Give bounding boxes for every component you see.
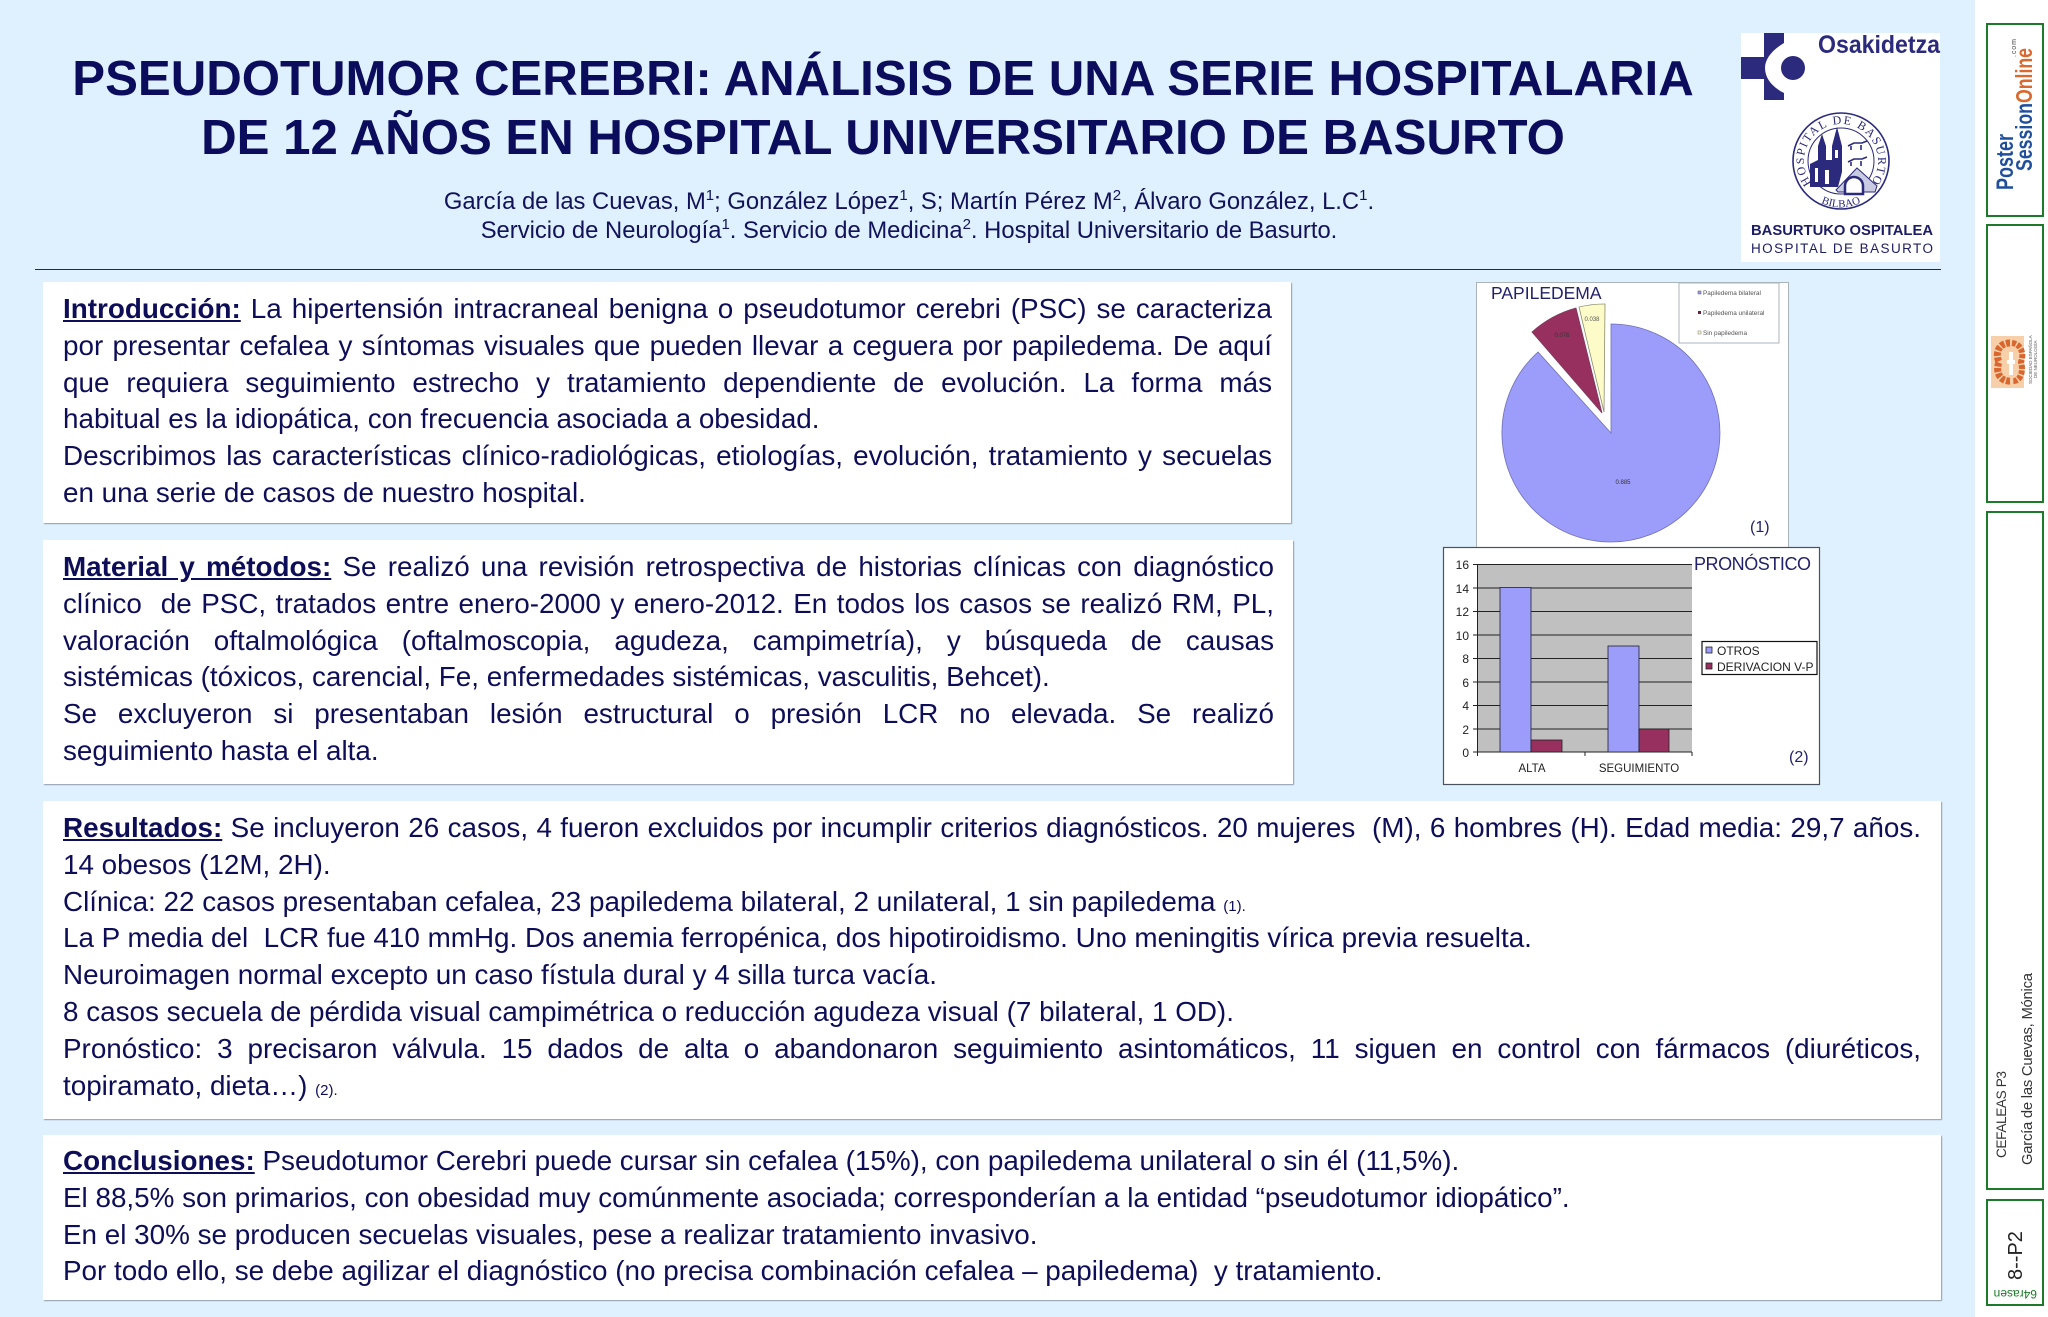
x axis labels xyxy=(1518,763,1679,775)
text: introducción: que requiera seguimiento estrecho y tratamiento dependiente de evolución. La forma más xyxy=(63,367,1272,398)
logo: PosterSessionOnline: Session xyxy=(2011,103,2037,171)
y axis labels xyxy=(1456,558,1469,760)
panel: conclusiones xyxy=(43,1135,1941,1300)
text: resultados: La P media del LCR fue 410 mmHg. Dos anemia ferropénica, dos hipotiroidismo. Uno meningitis vírica previa resuelta. xyxy=(63,922,1532,953)
panel: material y métodos xyxy=(43,540,1293,784)
y axis labels: 16 xyxy=(1456,558,1469,572)
sidebar xyxy=(1975,0,2048,1317)
text: material y métodos: valoración oftalmológica (oftalmoscopia, agudeza, campimetría), y búsqueda de causas xyxy=(63,625,1274,656)
legend: DERIVACION V-P xyxy=(1717,660,1813,674)
text: material y métodos xyxy=(63,551,1274,766)
pie chart: papiledema xyxy=(1476,282,1789,547)
text: resultados: Clínica: 22 casos presentaban cefalea, 23 papiledema bilateral, 2 unilateral, 1 sin papiledema (1). xyxy=(63,886,1246,917)
session label: CEFALEAS P3 xyxy=(1994,1071,2009,1158)
y axis labels: 6 xyxy=(1462,676,1469,690)
title: PSEUDOTUMOR CEREBRI: ANÁLISIS DE UNA SERIE HOSPITALARIA xyxy=(72,51,1694,106)
slice: unilateral xyxy=(1532,308,1602,413)
legend: Sin papiledema xyxy=(1703,330,1748,337)
text: material y métodos: Material y métodos: Se realizó una revisión retrospectiva de historias clínicas con diagnóstico xyxy=(63,551,1274,582)
bars: seguimiento xyxy=(1608,646,1669,752)
logo: PosterSessionOnline: Poster xyxy=(1992,134,2019,190)
y axis labels: 10 xyxy=(1456,629,1469,643)
legend: Papiledema bilateral xyxy=(1703,290,1761,297)
authors and affiliations xyxy=(444,187,1374,244)
text: introducción: por presentar cefalea y síntomas visuales que pueden llevar a ceguera por papiledema. De aquí xyxy=(63,330,1272,361)
session label xyxy=(1994,972,2036,1165)
slice: sin papiledema xyxy=(1579,304,1605,412)
legend xyxy=(1702,642,1817,674)
chart title: PAPILEDEMA xyxy=(1491,283,1602,303)
panel: resultados xyxy=(43,801,1941,1119)
x axis labels: SEGUIMIENTO xyxy=(1599,763,1679,775)
text: material y métodos: clínico de PSC, tratados entre enero-2000 y enero-2012. En todos los casos se realizó RM, PL, xyxy=(63,588,1274,619)
text: introducción: en una serie de casos de nuestro hospital. xyxy=(63,477,586,508)
authors and affiliations: Servicio de Neurología1. Servicio de Medicina2. Hospital Universitario de Basurto. xyxy=(481,216,1337,244)
box: PosterSessionOnline logo xyxy=(1986,23,2044,217)
pie chart: papiledema: 0.038 xyxy=(1584,317,1600,323)
reference (1): (1) xyxy=(1750,519,1770,536)
title xyxy=(72,51,1694,165)
logo text: Basurtuko Ospitalea: BASURTUKO OSPITALEA xyxy=(1751,222,1933,239)
text: conclusiones: Por todo ello, se debe agilizar el diagnóstico (no precisa combinación cefalea – papiledema) y tratamiento. xyxy=(63,1255,1382,1286)
text: resultados: 8 casos secuela de pérdida visual campimétrica o reducción agudeza visual (7 bilateral, 1 OD). xyxy=(63,996,1234,1027)
text: introducción xyxy=(63,293,1272,508)
text: resultados: 14 obesos (12M, 2H). xyxy=(63,849,331,880)
logo: PosterSessionOnline: .com xyxy=(2011,39,2018,57)
logo: Sociedad Española de Neurología xyxy=(1991,335,2038,388)
code label inverted: 64rasen xyxy=(1994,1287,2037,1301)
bar chart: pronóstico xyxy=(1442,546,1820,786)
text: conclusiones: En el 30% se producen secuelas visuales, pese a realizar tratamiento invasivo. xyxy=(63,1219,1038,1250)
logo: PosterSessionOnline: Online xyxy=(2011,48,2037,103)
icon: hospital seal: HOSPITAL DE BASURTO xyxy=(1796,116,1886,188)
legend: OTROS xyxy=(1717,644,1760,658)
pie chart: papiledema: 0.885 xyxy=(1615,480,1631,486)
pie chart: papiledema: 0.076 xyxy=(1554,333,1570,339)
legend: Papiledema unilateral xyxy=(1703,310,1764,317)
text: conclusiones: El 88,5% son primarios, con obesidad muy comúnmente asociada; corresponderían a la entidad “pseudotumor idiopático”. xyxy=(63,1182,1570,1213)
text: introducción: habitual es la idiopática, con frecuencia asociada a obesidad. xyxy=(63,403,820,434)
poster code: 8--P2 xyxy=(2005,1231,2027,1280)
plot area xyxy=(1478,564,1692,752)
author label: García de las Cuevas, Mónica xyxy=(2020,972,2036,1165)
icon: hospital seal: BILBAO xyxy=(1821,196,1860,208)
logo: Sociedad Española de Neurología: DE NEUROLOGÍA xyxy=(2032,340,2038,378)
text: introducción: Describimos las características clínico-radiológicas, etiologías, evolución, tratamiento y secuelas xyxy=(63,440,1272,471)
text: resultados: Pronóstico: 3 precisaron válvula. 15 dados de alta o abandonaron seguimiento asintomáticos, 11 siguen en control con fármacos (diuréticos, xyxy=(63,1033,1921,1064)
panel: introducción xyxy=(43,282,1291,523)
y axis labels: 2 xyxy=(1462,723,1469,737)
icon: Osakidetza cross xyxy=(1741,33,1805,100)
authors and affiliations: García de las Cuevas, M1; González López1, S; Martín Pérez M2, Álvaro González, L.C1. xyxy=(444,187,1374,215)
text: material y métodos: seguimiento hasta el alta. xyxy=(63,735,379,766)
text: introducción: Introducción: La hipertensión intracraneal benigna o pseudotumor cerebri (PSC) se caracteriza xyxy=(63,293,1272,324)
y axis labels: 14 xyxy=(1456,582,1469,596)
y axis labels: 12 xyxy=(1456,605,1469,619)
logo text: Osakidetza: Osakidetza xyxy=(1818,31,1941,59)
y axis labels: 8 xyxy=(1462,652,1469,666)
logos: Osakidetza and Hospital de Basurto xyxy=(1741,31,1941,262)
slice: bilateral xyxy=(1502,324,1720,542)
chart title: PRONÓSTICO xyxy=(1694,553,1811,574)
text: conclusiones xyxy=(63,1145,1570,1286)
text: resultados xyxy=(63,812,1921,1101)
logo: Sociedad Española de Neurología: SOCIEDAD ESPAÑOLA xyxy=(2027,335,2033,384)
logo: PosterSessionOnline xyxy=(1992,39,2037,190)
reference (2): (2) xyxy=(1789,749,1809,766)
text: conclusiones: Conclusiones: Pseudotumor Cerebri puede cursar sin cefalea (15%), con papiledema unilateral o sin él (11,5%). xyxy=(63,1145,1459,1176)
text: material y métodos: Se excluyeron si presentaban lesión estructural o presión LCR no elevada. Se realizó xyxy=(63,698,1274,729)
poster code xyxy=(1994,1231,2037,1301)
legend xyxy=(1679,283,1779,343)
text: resultados: Neuroimagen normal excepto un caso fístula dural y 4 silla turca vacía. xyxy=(63,959,937,990)
y axis labels: 0 xyxy=(1462,746,1469,760)
box: neurology society logo xyxy=(1986,224,2044,503)
y axis labels: 4 xyxy=(1462,699,1469,713)
logo text: Hospital de Basurto: HOSPITAL DE BASURTO xyxy=(1751,241,1933,256)
text: resultados: Resultados: Se incluyeron 26 casos, 4 fueron excluidos por incumplir criterios diagnósticos. 20 mujeres (M), 6 hombres (H). Edad media: 29,7 años. xyxy=(63,812,1921,843)
text: material y métodos: sistémicas (tóxicos, carencial, Fe, enfermedades sistémicas, vasculitis, Behcet). xyxy=(63,661,1050,692)
box: poster code xyxy=(1986,1199,2044,1306)
title: DE 12 AÑOS EN HOSPITAL UNIVERSITARIO DE BASURTO xyxy=(201,110,1565,165)
box: session and author xyxy=(1986,511,2044,1190)
text: resultados: topiramato, dieta…) (2). xyxy=(63,1070,338,1101)
x axis labels: ALTA xyxy=(1518,763,1546,775)
bars: alta xyxy=(1500,588,1562,752)
